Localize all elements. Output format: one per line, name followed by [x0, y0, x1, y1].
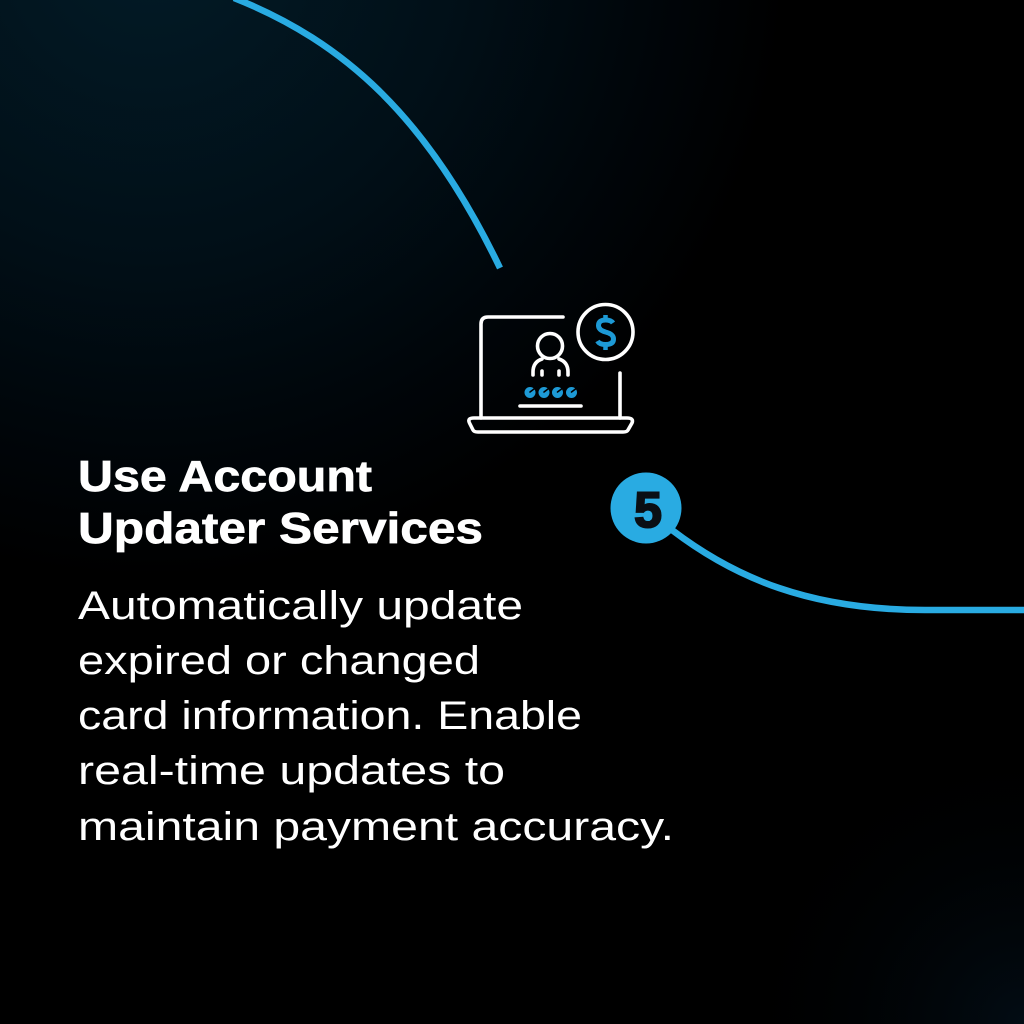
number badge: 5	[610, 472, 682, 544]
arrow: top curved connector	[234, 0, 500, 268]
icon: dollar coin	[578, 304, 633, 360]
body text: maintain payment accuracy.	[78, 805, 674, 849]
body text: expired or changed	[78, 639, 480, 683]
body text: real-time updates to	[78, 749, 505, 793]
icon: laptop with user and dollar coin	[469, 304, 633, 432]
arrow: right curved connector	[672, 530, 1024, 610]
body text	[78, 584, 674, 849]
icon: user	[533, 334, 568, 375]
heading: Updater Services	[78, 504, 483, 553]
body text: Automatically update	[78, 584, 523, 628]
heading: Use Account	[78, 452, 372, 501]
number badge: 5: 5	[634, 482, 662, 538]
icon: masked card digits	[524, 387, 577, 398]
icon: laptop outline	[469, 317, 632, 432]
body text: card information. Enable	[78, 694, 582, 738]
heading	[78, 452, 483, 553]
